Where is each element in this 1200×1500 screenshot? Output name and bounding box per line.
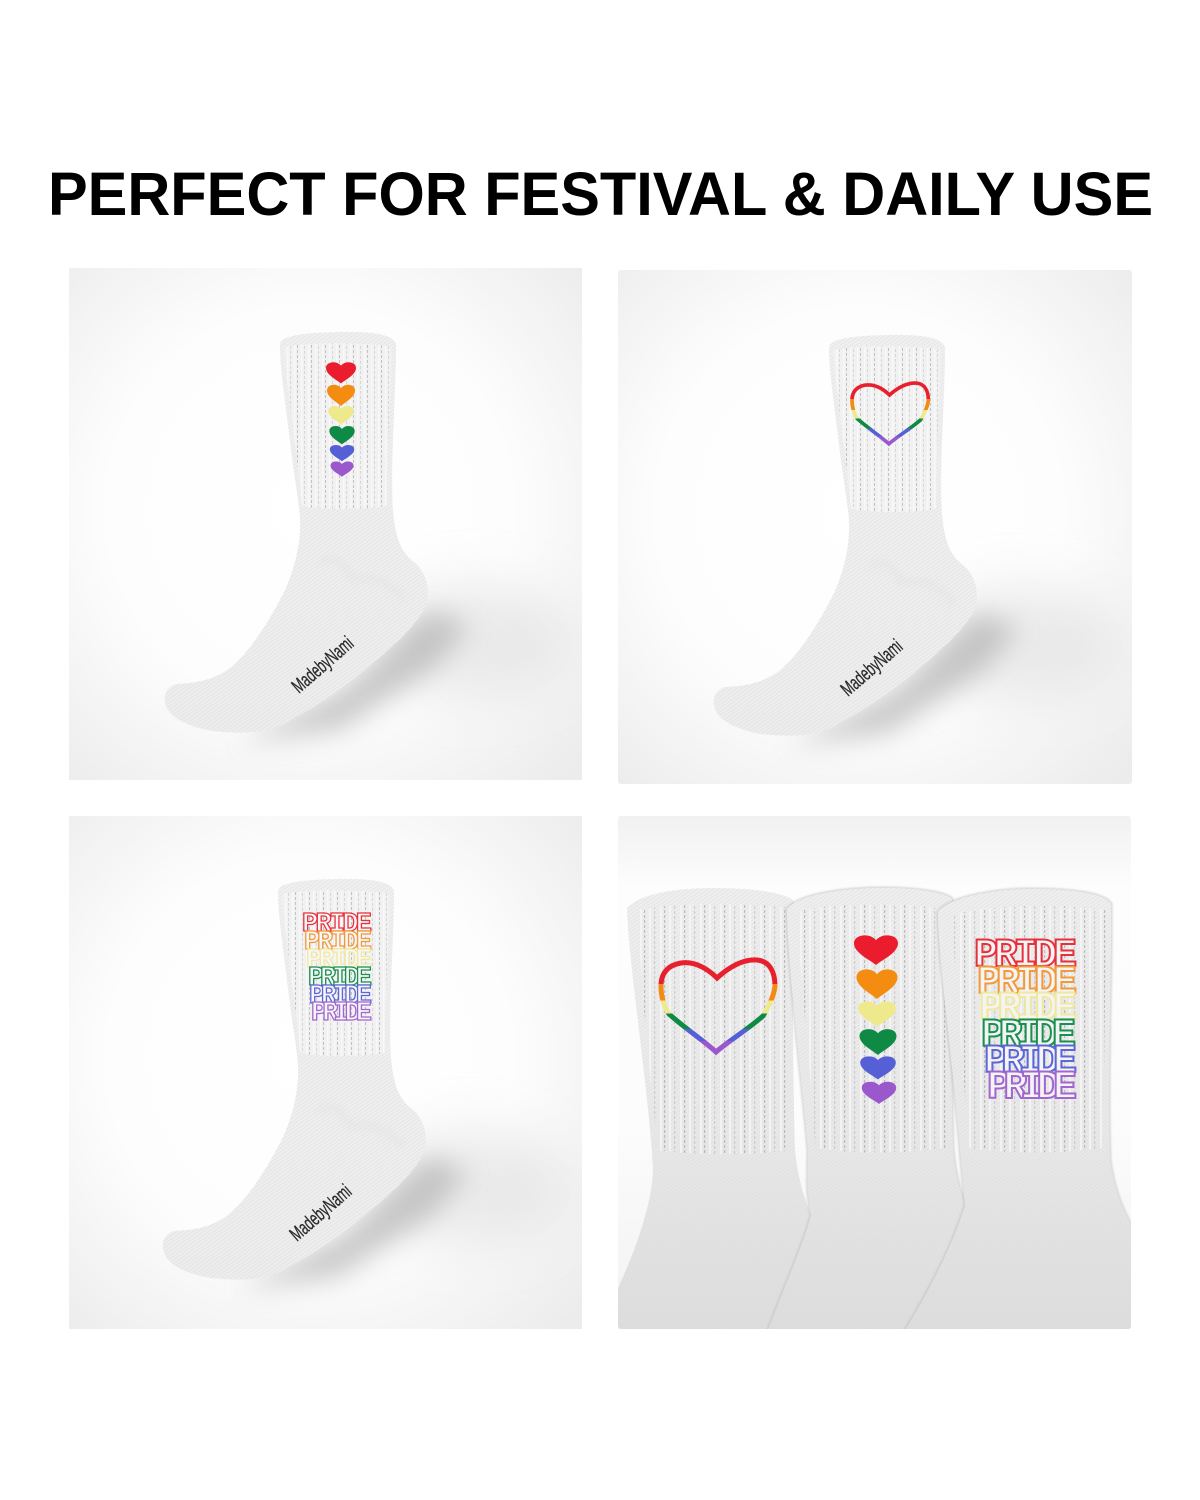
sock: heart column: [768, 888, 965, 1330]
stacked PRIDE lines: PRIDE: [979, 987, 1077, 1032]
panel: sock with six rainbow hearts: [69, 268, 582, 780]
stacked PRIDE lines: PRIDE: [306, 946, 372, 976]
stacked PRIDE lines: PRIDE: [974, 934, 1077, 979]
stacked PRIDE lines: PRIDE: [987, 1066, 1077, 1111]
heart column graphic: [854, 935, 898, 1104]
sock photo: [165, 332, 570, 742]
sock photo: [163, 879, 568, 1289]
panel: sock with rainbow heart outline: [618, 270, 1132, 784]
sole brand text: MadebyNami: [288, 633, 358, 698]
sole brand text: MadebyNami: [286, 1181, 356, 1246]
stacked PRIDE lines: PRIDE: [977, 961, 1077, 1006]
stacked PRIDE lines: PRIDE: [302, 910, 372, 940]
stacked PRIDE lines: [303, 912, 372, 1021]
stacked PRIDE lines: PRIDE: [311, 999, 372, 1029]
sock photo: [714, 335, 1119, 745]
stacked PRIDE lines: PRIDE: [981, 1014, 1076, 1059]
sock: heart outline: [618, 888, 811, 1330]
rainbow outline heart: [661, 960, 775, 1052]
stacked PRIDE lines: PRIDE: [309, 982, 372, 1012]
panel: three socks close-up: [618, 816, 1133, 1330]
stacked PRIDE lines: PRIDE: [308, 964, 372, 994]
sock: PRIDE text: [905, 889, 1133, 1330]
panel: sock with stacked PRIDE text: [69, 816, 582, 1329]
stacked PRIDE lines: [976, 938, 1076, 1099]
stacked PRIDE lines: PRIDE: [304, 928, 372, 958]
heart column graphic: [326, 362, 356, 477]
rainbow outline heart: [852, 383, 928, 444]
stacked PRIDE lines: PRIDE: [984, 1040, 1077, 1085]
sole brand text: MadebyNami: [837, 636, 907, 701]
title: PERFECT FOR FESTIVAL & DAILY USE: [48, 160, 1153, 228]
